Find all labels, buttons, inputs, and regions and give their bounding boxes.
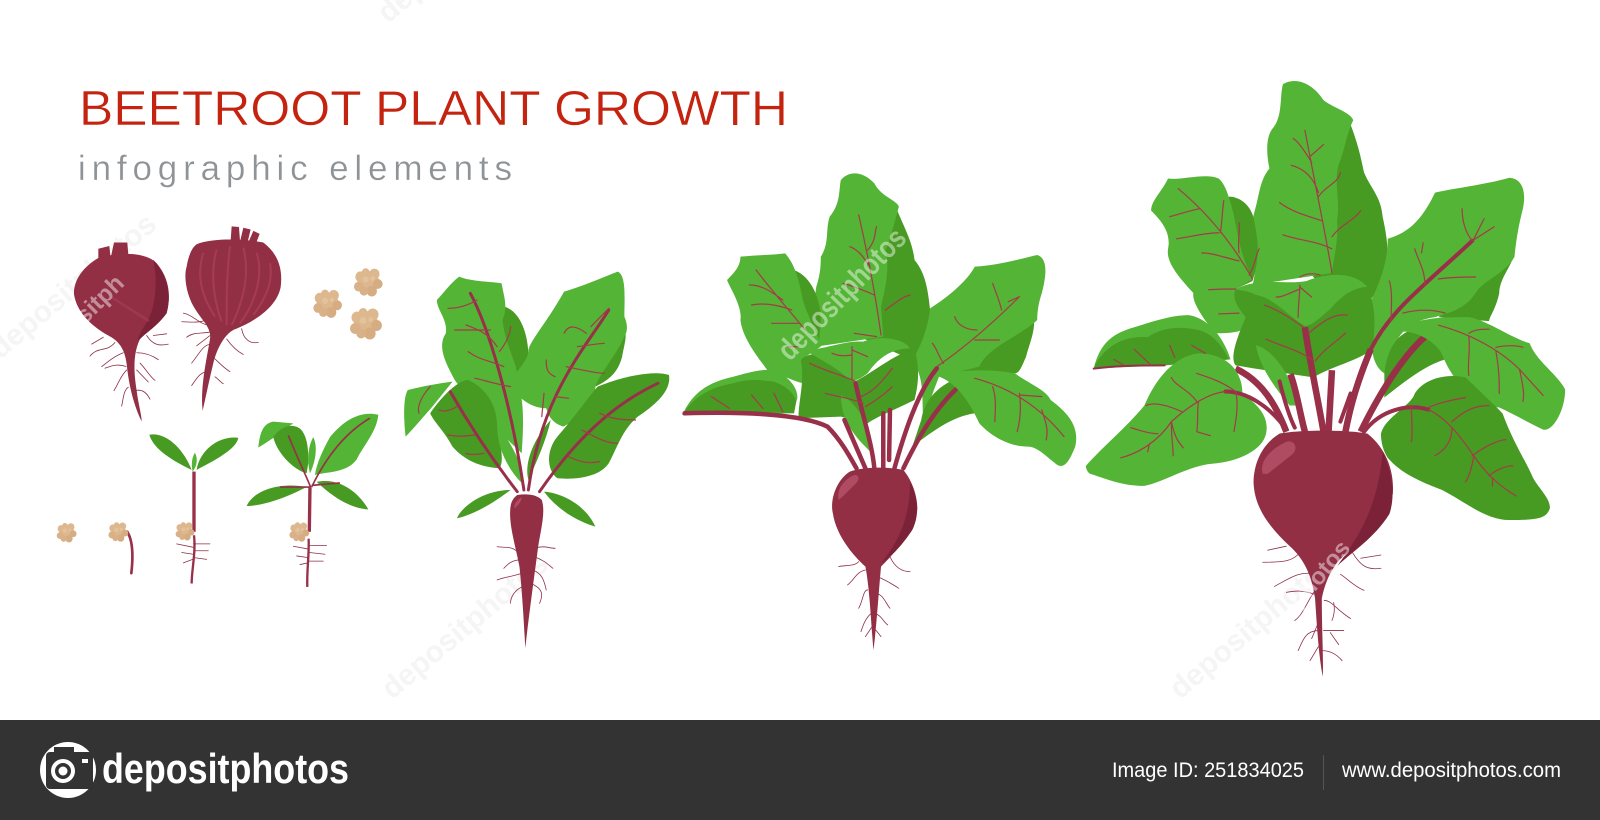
veins	[1114, 130, 1543, 496]
seedling stage 4	[247, 414, 378, 587]
cut beet with rootlets	[182, 226, 281, 411]
background watermarks: depositphotos	[1163, 547, 1343, 705]
medium plant stage	[682, 173, 1076, 650]
logo wordmark: depositphotos	[102, 745, 349, 792]
seed stage 1	[57, 523, 77, 542]
seeds cluster	[313, 268, 383, 339]
young plant stage	[404, 272, 669, 648]
foreground watermarks	[70, 222, 1356, 614]
front right light leaf	[1391, 317, 1565, 430]
background watermarks: depositphotos	[375, 547, 555, 705]
subtitle: infographic elements	[78, 149, 512, 188]
far-left leaf stem	[1094, 365, 1165, 369]
front left light leaf	[1086, 353, 1267, 486]
veins	[711, 215, 1064, 440]
background watermarks	[0, 0, 1343, 705]
footer bar	[0, 720, 1600, 820]
front right dark leaf	[1381, 376, 1550, 520]
footer logo	[40, 742, 349, 798]
foreground watermarks: sitph	[70, 270, 130, 329]
front right leaf	[939, 370, 1076, 466]
mature plant stage	[1086, 81, 1565, 677]
leaves	[404, 272, 669, 527]
back leaves	[1094, 81, 1524, 406]
icon: camera badge	[40, 742, 96, 798]
stems	[685, 368, 957, 468]
round root with rootlets	[832, 468, 917, 650]
foreground watermarks: photos	[1284, 535, 1356, 614]
tapered root with rootlets	[497, 494, 555, 648]
seedling stage 3	[149, 434, 238, 583]
mature beet with rootlets	[74, 243, 169, 422]
stems	[1236, 241, 1472, 432]
seed stage 2 germination	[108, 522, 132, 573]
foreground watermarks: depositphotos	[771, 222, 913, 367]
front leaf stems	[1225, 391, 1428, 432]
stems and veins	[418, 293, 658, 492]
small stages group	[57, 226, 383, 587]
image id: Image ID: 251834025	[1112, 759, 1304, 782]
website: www.depositphotos.com	[1341, 759, 1561, 782]
title: BEETROOT PLANT GROWTH	[79, 82, 788, 136]
round beet with rootlets	[1254, 431, 1393, 677]
leaves	[682, 173, 1045, 453]
